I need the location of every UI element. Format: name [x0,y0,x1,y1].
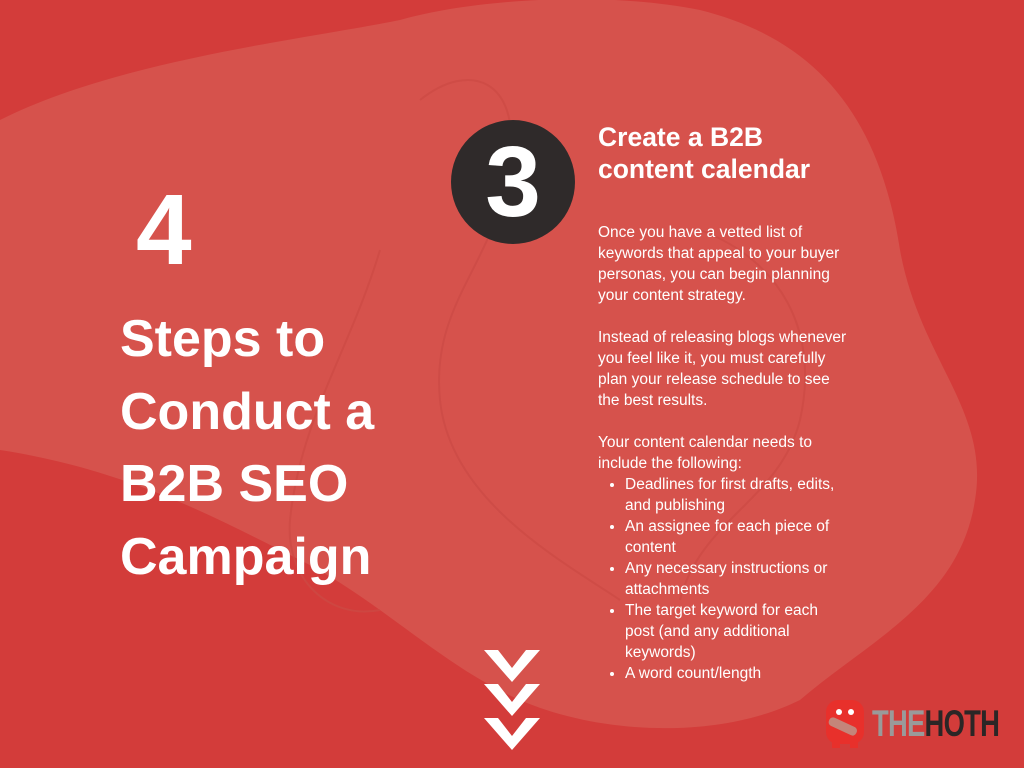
step heading: content calendar [598,154,810,184]
step body text: Instead of releasing blogs whenever you feel like it, you must carefully plan your release schedule to see the best results. [598,329,846,409]
icon: number 3 circle [451,120,575,244]
step body text: Once you have a vetted list of keywords that appeal to your buyer personas, you can begin planning your content strategy. [598,224,839,304]
step body text: Deadlines for first drafts, edits, and publishing [625,476,834,514]
logo: The Hoth [826,700,999,748]
logo: The Hoth: THEHOTH [872,703,999,744]
title [120,310,374,586]
title: B2B SEO [120,455,348,513]
step body text: Your content calendar needs to include the following: [598,434,812,472]
title: Steps to [120,310,325,368]
step heading: Create a B2B [598,122,763,152]
step body text [598,224,846,682]
step body text: The target keyword for each post (and any additional keywords) [625,602,818,661]
step heading [598,122,810,184]
icon: number 3 circle: 3 [485,126,541,238]
step body text: An assignee for each piece of content [625,518,829,556]
arrow: down chevrons [484,650,540,750]
title: Conduct a [120,382,374,440]
step body text: Any necessary instructions or attachments [625,560,827,598]
number 4: 4 [136,174,192,286]
title: Campaign [120,528,371,586]
step body text: A word count/length [625,665,761,682]
